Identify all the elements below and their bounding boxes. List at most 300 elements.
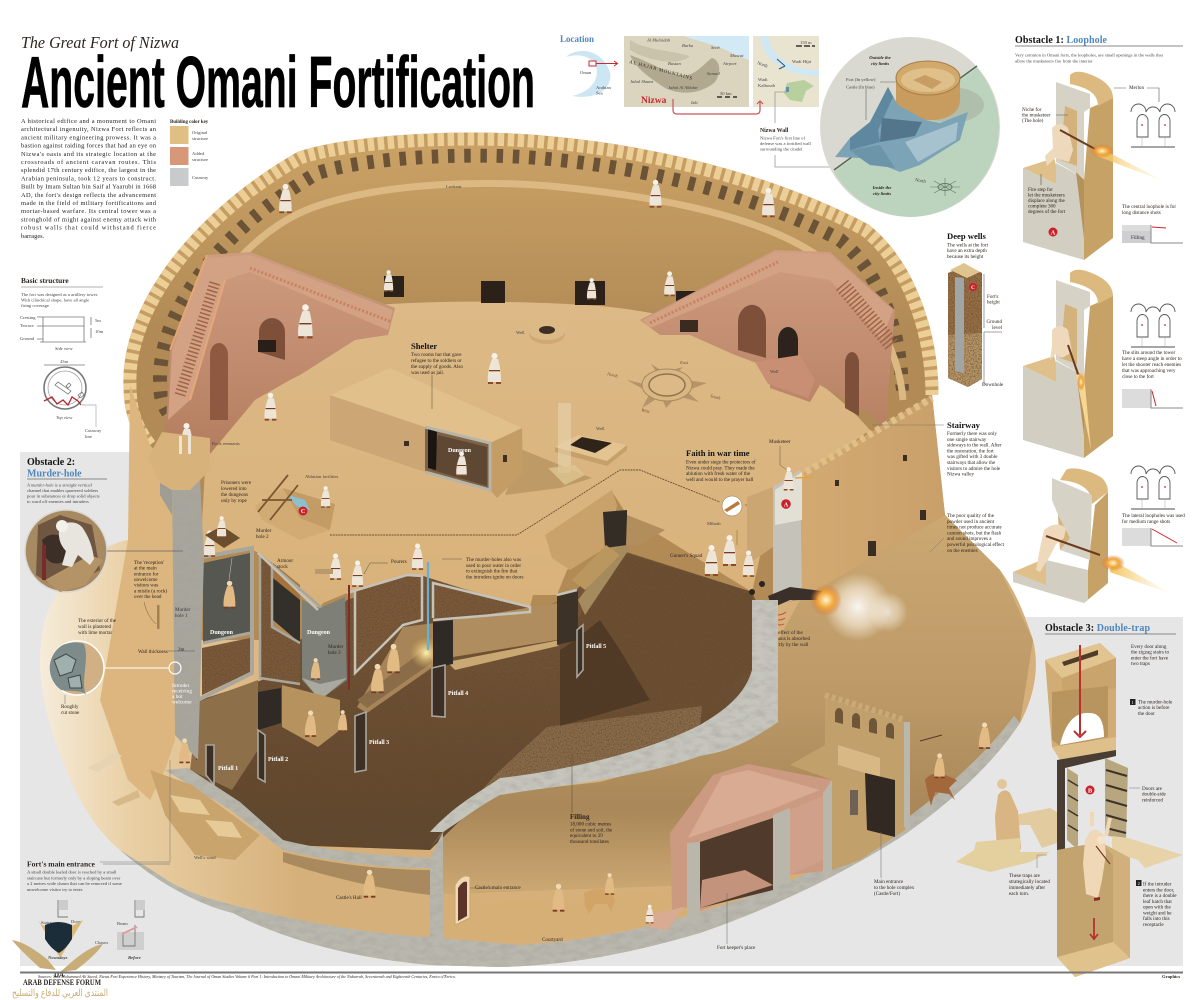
fort keeper's pink building <box>648 764 832 930</box>
basic structure diagram: line <box>85 434 92 439</box>
obstacle 1: loophole: The central loophole is for <box>1122 203 1176 210</box>
location map: Sea <box>596 90 603 96</box>
mihrab prayer icon <box>707 496 765 526</box>
location map <box>560 34 819 114</box>
walkway <box>172 183 903 420</box>
door diagrams: Chasm <box>95 940 108 945</box>
obstacle 2: murder-hole panel: cut stone <box>61 710 80 716</box>
building color key: Original <box>192 130 208 135</box>
Nizwa wall callout <box>760 92 833 167</box>
background panels <box>20 452 1183 966</box>
map: region: Nizwa <box>641 96 667 106</box>
labels: the zigzag stairs to <box>1131 650 1170 656</box>
stairway note: visitors to admire the hole <box>947 466 1001 472</box>
ring left part and partition wall <box>165 768 443 940</box>
armour stock room <box>258 553 322 684</box>
fort's main entrance: a 2 metres wide chasm that can be removed if some <box>27 881 122 886</box>
obstacle 1: loophole: let the shooter reach enemies <box>1122 362 1181 368</box>
filling callout <box>570 755 613 845</box>
prayer hall tower <box>747 439 812 605</box>
courtyard labels and figures <box>336 832 915 951</box>
deep wells diagram: Downhole <box>982 382 1004 388</box>
map: Nizwa wall: North <box>757 60 769 69</box>
deep wells diagram: height <box>987 300 1000 306</box>
intro text: crossroads of ancient caravan routes. This <box>21 159 157 166</box>
building color key: Added <box>192 151 205 156</box>
central well <box>529 322 565 344</box>
powder note: powder used in ancient <box>947 519 995 525</box>
labels: Every door along <box>1131 644 1167 650</box>
labels: falls into this <box>1143 915 1170 922</box>
building color key: structure <box>192 157 208 162</box>
intro text: mortar-based warfare. Its central tower was a <box>21 208 156 215</box>
obstacle 2: murder-hole panel: to ward off enemies and intruders <box>27 499 89 504</box>
courtyard labels and figures: (Castle/Fort) <box>874 890 900 897</box>
bottom rule <box>20 972 1183 974</box>
armour stock room: stock <box>277 564 288 570</box>
circle: wall material <box>50 641 104 695</box>
obstacle 2: murder-hole panel: entrance for <box>134 570 159 577</box>
obstacle 2: murder-hole panel: Murder <box>175 607 191 613</box>
floor labels: the intruders ignite on doors <box>466 574 523 580</box>
labels on upper floor <box>212 330 779 479</box>
obstacle 2: murder-hole panel: unwelcome <box>134 577 158 583</box>
upper murder-hole box <box>1045 643 1116 763</box>
dungeon 1 <box>198 548 252 700</box>
front steps and well's ward <box>100 760 260 862</box>
cannon and blast <box>749 573 908 648</box>
map: region: Bustan <box>668 61 681 66</box>
obstacle 2: murder-hole panel: Murder-hole <box>27 468 82 480</box>
stairway note: the restoration, the fort <box>947 447 994 454</box>
deep wells diagram: Fort's <box>987 294 998 300</box>
loophole A block: let the musketeers <box>1028 192 1065 198</box>
terrace floor <box>200 302 870 610</box>
basic structure diagram <box>20 276 104 439</box>
stairway note <box>947 420 1002 478</box>
deep wells diagram <box>947 231 1004 388</box>
loophole C block <box>1013 468 1174 603</box>
location map: Arabian <box>596 85 611 90</box>
obstacle 1: loophole <box>1013 35 1185 603</box>
basic structure diagram: Cutaway <box>85 428 102 433</box>
shelter callout: was used as jail. <box>411 370 444 376</box>
obstacle 2: murder-hole panel: Wall thickness <box>138 649 168 655</box>
intro text: barrages. <box>21 233 45 240</box>
filling callout: Filling <box>570 813 590 821</box>
stairway note: Nizwa valley <box>947 472 974 478</box>
labels: action is before <box>1138 704 1170 711</box>
logo watermark: ARAB DEFENSE FORUM <box>23 977 101 987</box>
labels: the door <box>1138 711 1155 717</box>
obstacle 3: double trap <box>956 623 1183 977</box>
main title: Ancient Omani Fortification <box>21 43 535 123</box>
compass rose on floor: East <box>679 360 689 365</box>
obstacle 1: loophole: that was approaching very <box>1122 368 1176 374</box>
added structure: left pink staircase <box>165 252 395 460</box>
basic structure diagram: firing coverage <box>21 303 49 308</box>
loophole A block: A <box>1051 230 1056 236</box>
fort's main entrance: A small double leafed door is reached by a small <box>27 870 117 874</box>
deep wells diagram: Deep wells <box>947 231 987 241</box>
lower passage room under dungeon 1 <box>190 680 258 790</box>
compass rose on floor <box>606 360 722 414</box>
obstacle 2: murder-hole panel <box>25 457 252 716</box>
castle door <box>455 876 495 925</box>
range chart C <box>1122 528 1183 546</box>
filling callout: thousand tonsilates <box>570 839 609 845</box>
stairway leader <box>872 424 944 426</box>
fort's main entrance <box>27 860 170 960</box>
subtitle: The Great Fort of Nizwa <box>21 33 179 52</box>
obstacle 2: murder-hole panel: channel that enables quartered soldiers <box>27 488 98 493</box>
shelter callout <box>411 341 463 409</box>
shelter callout: Two rooms hut that gave <box>411 352 462 358</box>
compass rose on floor: West <box>641 407 651 414</box>
gatehouse <box>790 695 910 870</box>
location map: Location <box>560 34 594 44</box>
merlons <box>130 139 932 445</box>
intro text: stronghold of might against enemy attack with <box>21 216 157 223</box>
compass rose on floor: North <box>606 371 619 379</box>
pitfall labels: Pitfall 2 <box>268 757 288 763</box>
obstacle 2: murder-hole panel: with lime mortar <box>78 630 113 636</box>
powder note <box>930 512 1005 554</box>
labels: strategically located <box>1009 879 1050 885</box>
lower shaft <box>1057 842 1130 977</box>
sources line: Sources: Said Mohammed Ali Saeed, Nizwa Fort Experience History, Ministry of Tourism, The Journal of Oman Studies Volume 6 Part 1: Introduction to Omani Military Architecture of the Nabarrah, Seventeenth and Eighteenth Centuries, Enrico d'Errico. <box>38 975 456 980</box>
dungeon 2 <box>302 597 347 700</box>
loophole diagram B <box>1131 304 1175 347</box>
labels: two traps <box>1131 661 1150 667</box>
Nizwa wall callout: Nizwa Fort's first line of <box>760 136 805 140</box>
range chart A <box>1122 225 1183 243</box>
labels: weight and he <box>1143 910 1172 916</box>
fort's main entrance: staircase but formerly only by a sloping beam over <box>27 875 121 880</box>
labels: each turn. <box>1009 891 1029 897</box>
mid wall and stair <box>433 545 630 670</box>
intro text <box>21 118 157 240</box>
courtyard labels and figures: to the hole complex <box>874 885 915 891</box>
deep wells diagram: have an extra depth <box>947 248 987 254</box>
horseman and runner <box>920 723 990 806</box>
powder note: and sound improves a <box>947 536 992 542</box>
obstacle 2: murder-hole panel: The 'reception' <box>134 560 164 566</box>
labels: leaf hatch that <box>1143 898 1172 905</box>
labels: open with the <box>1143 905 1171 911</box>
floor cut strips <box>258 553 577 673</box>
intro text: ancient military engineering prowess. It was a <box>21 134 156 141</box>
intro text: robust walls that could withstand fierce <box>21 225 156 232</box>
pitfall labels <box>218 644 606 772</box>
stair and door to pit on right <box>545 490 665 590</box>
basic structure diagram: The fort was designed as a artillery tower. <box>21 292 98 297</box>
obstacle 2: murder-hole panel: pour in substances or drop solid objects <box>27 494 100 498</box>
left outer wall <box>100 385 210 800</box>
circle: soldier pouring <box>25 510 107 592</box>
ablution facilities: C <box>301 509 305 515</box>
man walking up stairs <box>956 779 1050 872</box>
faith in war time callout: Even under siege the protectors of <box>686 458 756 466</box>
labels on upper floor: Well <box>770 369 779 374</box>
deep wells diagram: level <box>992 325 1003 331</box>
right crescent wall <box>775 395 945 600</box>
logo watermark: المنتدى العربي للدفاع والتسليح <box>12 988 108 999</box>
powder note: times not produce accurate <box>947 525 1002 531</box>
deep wells diagram: Ground <box>986 319 1002 325</box>
pitfall labels: Pitfall 1 <box>218 766 238 772</box>
obstacle 2: murder-hole panel: The exterior of the <box>78 617 117 624</box>
door diagrams: Beam <box>117 921 128 926</box>
building color key: Cutaway <box>192 175 209 180</box>
basic structure diagram: 10m <box>95 329 104 334</box>
merlon label: Merlon <box>1129 85 1144 91</box>
obstacle 2: murder-hole panel: over the head <box>134 594 162 600</box>
added structure: right pink staircase <box>640 250 895 430</box>
obstacle 2: murder-hole panel: Intruder <box>172 683 190 689</box>
filling callout: 18,000 cubic metres <box>570 822 611 828</box>
obstacle 1: loophole: The lateral loopholes was used <box>1122 513 1185 519</box>
obstacle 1: loophole: long distance shots <box>1122 210 1161 216</box>
door diagrams: Door <box>71 919 81 924</box>
dungeon 2: hole 3 <box>328 650 341 656</box>
obstacle 2: murder-hole panel: Prisoners were <box>221 480 252 486</box>
cannon and blast: cannons is absorbed <box>769 636 810 642</box>
map: region: Izki <box>690 100 698 105</box>
labels: Doors are <box>1142 786 1163 792</box>
circle inset: fort and castle in the city: city limits <box>873 191 891 196</box>
rising passage with burning glow <box>357 622 443 713</box>
building color key: Building color key <box>170 120 209 125</box>
faith in war time callout: Faith in war time <box>686 448 750 458</box>
labels: If the intruder <box>1143 880 1172 888</box>
labels on upper floor: Ablution facilities <box>305 474 339 479</box>
map: region: 50 km <box>720 91 732 96</box>
basic structure diagram: Ground <box>20 336 35 341</box>
floor labels: Pourers <box>391 559 407 565</box>
logo watermark <box>12 920 108 999</box>
fort's main entrance: Fort's main entrance <box>27 860 96 868</box>
labels: 1 <box>1132 700 1134 705</box>
circle inset: fort and castle in the city <box>820 37 1000 217</box>
obstacle 1: loophole: have a steep angle in order to <box>1122 356 1182 362</box>
map: region <box>624 36 749 107</box>
outer parapet <box>130 139 945 640</box>
labels on upper floor: Rock remnants <box>212 441 240 446</box>
murder-hole water and blood streams <box>197 553 428 760</box>
intro text: made in the field of military fortifications and <box>21 200 157 207</box>
Nizwa wall callout: surrounding the citadel <box>760 146 803 152</box>
cut outer wall band <box>120 716 1020 967</box>
door diagrams: Nowadays <box>47 955 68 960</box>
deep wells diagram: The wells at the fort <box>947 242 989 248</box>
basic structure diagram: Cresting <box>20 315 36 320</box>
loophole A block: degrees of the fort <box>1028 208 1066 215</box>
courtyard floor <box>443 716 1020 941</box>
intro text: splendid 17th century edifice, the largest in the <box>21 167 156 174</box>
map: region: Muscat <box>729 53 744 58</box>
basic structure diagram: Terrace <box>20 323 34 328</box>
map: region: Samail <box>707 71 720 76</box>
pitfall shafts <box>206 625 583 785</box>
text: Lookout <box>446 184 462 189</box>
basic structure diagram: With cilindrical shape, have all angle <box>21 298 89 304</box>
basic structure diagram: Basic structure <box>21 276 69 285</box>
dungeon 2: Murder <box>328 644 344 650</box>
circle inset: fort and castle in the city: North <box>915 177 927 184</box>
basic structure diagram: Top view <box>56 415 73 420</box>
map: Nizwa wall: 150 m <box>800 40 812 45</box>
loophole A block <box>1022 72 1168 260</box>
icon: globe locator <box>566 51 618 97</box>
courtyard labels and figures: Castle's main entrance <box>475 885 521 891</box>
obstacle 2: murder-hole panel: receiving <box>172 688 192 694</box>
filling callout: equivalent to 29 <box>570 833 603 839</box>
graphics credit: Graphics <box>1162 974 1180 979</box>
obstacle 2: murder-hole panel: a hot <box>172 694 183 700</box>
prayer hall tower: A <box>784 502 789 508</box>
armour stock room: Armour <box>277 558 293 564</box>
labels: enters the door, <box>1143 887 1174 893</box>
floor labels: The murder-holes also was <box>466 557 521 563</box>
labels: double-side <box>1142 792 1167 798</box>
dark pit shadow <box>560 620 650 726</box>
inner courtyard wall <box>443 515 1033 895</box>
labels on upper floor: Well <box>516 330 525 335</box>
powder note: powerful psicological effect <box>947 541 1005 548</box>
title block <box>21 33 535 123</box>
intro text: A historical edifice and a monument to Omani <box>21 118 156 125</box>
circle inset: fort and castle in the city: Inside the <box>872 185 891 190</box>
location map: Oman <box>580 70 592 75</box>
merlon label <box>1114 85 1159 102</box>
gunners squad <box>670 530 754 577</box>
obstacle 1: loophole: close to the fort <box>1122 373 1154 380</box>
obstacle 1: loophole: allow the musketeers fire from the interior <box>1015 58 1093 64</box>
intro text: AD, the fort's design reflects the advancement <box>21 192 156 199</box>
labels: immediately after <box>1009 884 1045 891</box>
filling callout: of stone and soil, the <box>570 826 613 833</box>
loophole A block: displace along the <box>1028 198 1066 204</box>
obstacle 2: murder-hole panel: A murder-hole is a straight vertical <box>26 482 93 488</box>
stairway note: Stairway <box>947 420 981 430</box>
intro text: bastion against raiding forces that had an eye on <box>21 143 157 150</box>
front steps and well's ward: Well's ward <box>194 855 216 860</box>
shelter building: Dungeon <box>448 448 472 454</box>
obstacle 2: murder-hole panel: Obstacle 2: <box>27 457 75 468</box>
fort's main entrance: unwelcome visitor try to enter. <box>27 887 83 892</box>
circle inset: fort and castle in the city: Castle (In blue) <box>846 84 875 90</box>
obstacle 1: loophole: Obstacle 1: Loophole <box>1015 35 1108 46</box>
pitfall labels: Pitfall 4 <box>448 691 468 697</box>
powder note: The poor quality of the <box>947 512 995 519</box>
obstacle 2: murder-hole panel: the dungeons <box>221 492 248 498</box>
fallen attackers <box>88 738 190 806</box>
map: Nizwa wall: Wadi Hijri <box>792 59 812 64</box>
cannon and blast: directly by the wall <box>769 642 809 648</box>
courtyard labels and figures: Fort keeper's place <box>717 945 756 951</box>
obstacle 1: loophole: Very common in Omani forts, the loopholes, are small openings in the walls that <box>1015 52 1164 58</box>
map: region: Al Mulaidah <box>646 38 671 42</box>
stairway note: one single stairway <box>947 437 987 443</box>
map: region: Seeb <box>711 45 720 50</box>
mihrab prayer icon: Mihrab <box>707 521 721 526</box>
gunners squad: Gunner's Squad <box>670 553 703 559</box>
courtyard labels and figures: Castle's Hall <box>336 895 362 901</box>
small castle <box>835 87 968 172</box>
Nizwa wall callout: Nizwa Wall <box>760 128 789 134</box>
faith in war time callout: Nizwa could pray. They made the <box>686 465 755 471</box>
obstacle 2: murder-hole panel: visitors was <box>134 583 158 589</box>
faith in war time callout: ablution with fresh water of the <box>686 470 751 477</box>
hall wall behind partition <box>283 852 430 895</box>
labels: reinforced <box>1142 796 1163 804</box>
dungeon 1: Dungeon <box>210 630 234 636</box>
mihrab prayer icon: Prayer <box>753 512 765 517</box>
grey cut ring around the pit <box>430 600 778 832</box>
labels on upper floor: Well <box>596 426 605 431</box>
floor labels: to extinguish the fire that <box>466 568 518 575</box>
floor labels: Murder <box>256 528 272 534</box>
fortress body with crenellated ring <box>130 139 945 640</box>
basic structure diagram: 5m <box>95 318 101 323</box>
map: Nizwa wall: Wadi <box>758 77 768 82</box>
stairway note: Formerly there was only <box>947 431 997 437</box>
faith in war time callout: well and would to the prayer hall <box>686 477 754 483</box>
courtyard labels and figures: Courtyard <box>542 937 563 943</box>
intro text: Arabian peninsula, took 12 years to construct. <box>21 175 156 182</box>
falling intruder <box>1083 812 1110 939</box>
floor labels <box>256 528 523 580</box>
base disc of the fortress <box>40 500 1036 967</box>
map: region: Jabal Shams <box>630 79 654 84</box>
labels: 2 <box>1138 881 1140 886</box>
intro text: architectural ingenuity, Nizwa Fort reflects an <box>21 126 157 133</box>
range chart A: Filling <box>1131 235 1145 241</box>
labels: there is a double <box>1143 893 1177 899</box>
compass rose on floor: South <box>710 393 722 401</box>
intro text: Nizwa's oasis and its strategic location at the <box>21 151 156 158</box>
loophole B block <box>1023 270 1113 458</box>
circle inset: fort and castle in the city: Fort (In yellow) <box>846 77 876 82</box>
soil mass <box>190 550 778 850</box>
prayer hall tower: Musketeer <box>769 439 791 445</box>
figures on the rampart <box>279 180 775 217</box>
map: Nizwa wall <box>753 36 819 107</box>
shelter callout: refugee to the soldiers or <box>411 357 462 364</box>
obstacle 2: murder-hole panel: at the main <box>134 566 157 572</box>
logo watermark: DA <box>54 971 64 979</box>
powder note: on the enemies <box>947 548 978 554</box>
lower tan room <box>258 685 347 747</box>
pitfall labels: Pitfall 3 <box>369 740 389 746</box>
cannon and blast: The effect of the <box>769 629 803 636</box>
range chart B <box>1122 389 1183 408</box>
obstacle 2: murder-hole panel: only by rope <box>221 498 247 504</box>
prisoner hatch <box>205 516 240 548</box>
underground dashed route <box>330 470 720 535</box>
door diagrams: Stairs <box>41 920 52 925</box>
loophole A block: (The hole) <box>1022 117 1044 124</box>
map: region: Jabal Al Akhdar <box>668 85 698 90</box>
intro text: Built by Imam Sultan bin Saif al Yaarubi in 1668 <box>21 184 156 191</box>
courtyard labels and figures: Main entrance <box>874 879 904 885</box>
loophole diagram C <box>1131 466 1175 509</box>
dungeon 2: Dungeon <box>307 630 331 636</box>
map: region: AL HAJAR MOUNTAINS <box>628 60 693 82</box>
obstacle 3: double trap: Obstacle 3: Double-trap <box>1045 623 1150 634</box>
door frame and doors: B <box>1088 788 1093 794</box>
